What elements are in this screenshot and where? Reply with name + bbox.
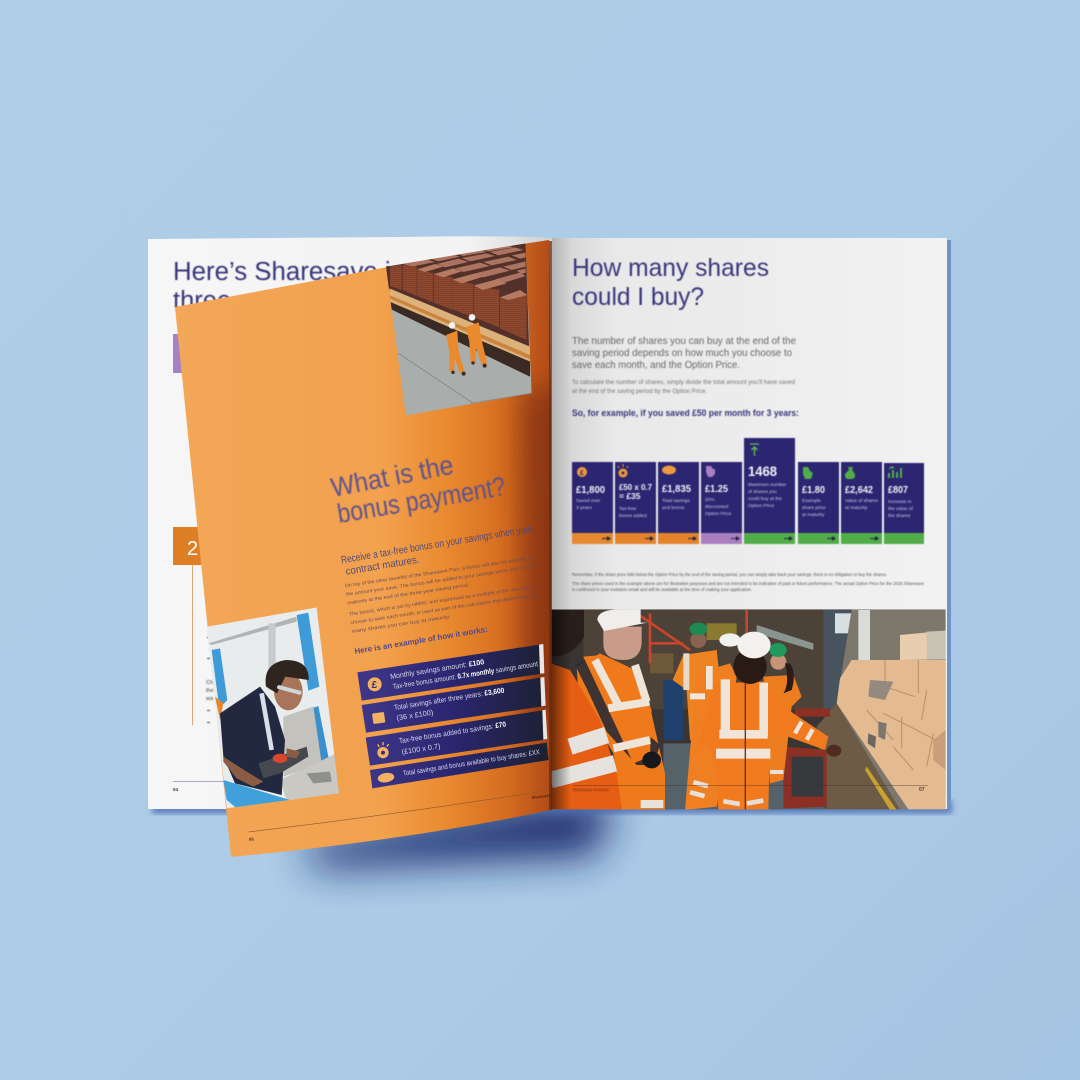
heading — [572, 254, 769, 311]
card: increase in value: the shares — [888, 513, 911, 519]
card: increase in value: Increase in — [888, 499, 912, 505]
card: tax-free bonus added: Tax-free — [619, 506, 637, 512]
brick wall — [837, 631, 946, 809]
card: tax-free bonus added: bonus added — [619, 513, 647, 519]
bar: monthly savings: £ — [372, 680, 378, 691]
bar: monthly savings: Monthly savings amount: £100 — [390, 657, 485, 681]
floor lines — [398, 353, 532, 403]
bullet list fragments: Ch — [206, 680, 213, 686]
bonus intro text: contract matures. — [345, 555, 420, 578]
photo: engineer holding a control device — [207, 607, 340, 808]
card: saved over 3 years: £ — [580, 470, 584, 477]
bar: monthly savings — [357, 644, 544, 701]
worker in navy and orange vest — [575, 609, 665, 810]
card: maximum number of shares: Option Price — [748, 503, 775, 509]
bullet list fragments — [205, 637, 214, 723]
intro paragraph: save each month, and the Option Price. — [572, 360, 740, 371]
heading: Here's Sharesave: three — [173, 287, 231, 315]
card: discounted Option Price: £1.25 — [705, 484, 728, 495]
card: tax-free bonus added: = £35 — [619, 491, 641, 501]
bar: total savings after three years: Total savings after three years: £3,600 — [393, 686, 505, 712]
card: total savings and bonus: and bonus — [662, 505, 685, 511]
footer rule on photo — [573, 784, 928, 787]
card: discounted Option Price: 20% — [705, 497, 715, 503]
foreground worker left — [551, 610, 622, 810]
intro paragraph: The number of shares you can buy at the end of the — [572, 336, 796, 347]
spine fold shading — [520, 390, 570, 730]
bonus body text: On top of the other benefits of the Sharesave Plan, a bonus will also be payable on — [344, 555, 535, 589]
bonus body text: many shares you can buy at maturity. — [351, 614, 451, 635]
orange step box 2 — [173, 527, 213, 565]
bonus body text: matures at the end of the three year saving period. — [347, 582, 470, 606]
heading: What is the bonus payment: What is the — [328, 450, 456, 503]
card: tax-free bonus added — [615, 462, 656, 544]
card: saved over 3 years: Saved over — [576, 498, 601, 504]
chart: step cards — [572, 438, 924, 544]
page number 07: 07 — [919, 787, 925, 793]
footer label on orange page: Sharesave — [532, 793, 551, 800]
card: value of shares at maturity: at maturity — [845, 505, 868, 511]
orange step box 2: 2 — [187, 538, 198, 560]
bar: tax-free bonus added: Tax-free bonus added to savings: £70 — [398, 719, 507, 745]
footer rule on orange page — [248, 790, 550, 832]
bar: tax-free bonus added: (£100 x 0.7) — [401, 741, 441, 756]
man — [220, 660, 309, 795]
card: maximum number of shares: of shares you — [748, 489, 777, 495]
card: total savings and bonus — [658, 462, 699, 544]
card: total savings and bonus: £1,835 — [662, 484, 691, 495]
bonus body text: the amount your save. The bonus will be added to your savings when your SAYE — [346, 564, 536, 598]
panel: turning orange page (page 06) — [175, 240, 570, 857]
shadow under the brochure — [152, 800, 952, 868]
disclaimer text: Remember, if the share price falls below the Option Price by the end of the saving period, you can simply take back your savings; there is no obligation to buy the shares. — [572, 572, 887, 577]
heading: What is the bonus payment — [328, 450, 508, 529]
card: increase in value: £807 — [888, 485, 908, 496]
bar: total savings after three years: (36 x £100) — [396, 708, 434, 722]
card: tax-free bonus added: £50 x 0.7 — [619, 482, 652, 492]
bullet list fragments: the — [206, 688, 214, 694]
card: value of shares at maturity: Value of shares — [845, 498, 879, 504]
card: increase in value: the value of — [888, 506, 913, 512]
card: example share price at maturity: £1.80 — [802, 485, 825, 496]
back rows of brick tops — [403, 245, 526, 283]
front row stacks — [390, 265, 527, 340]
bonus body text: The bonus, which is set by HMRC and expressed as a multiple of the amount you — [349, 583, 539, 618]
pallet bands — [389, 288, 530, 362]
heading: Here's Sharesave: Here’s Sharesave in — [173, 258, 405, 286]
footer rule — [173, 781, 233, 782]
card: saved over 3 years: £1,800 — [576, 485, 605, 496]
card: discounted Option Price: discounted — [705, 504, 729, 510]
bar: total savings after three years — [362, 677, 546, 733]
card: maximum number of shares — [744, 438, 795, 544]
disclaimer text: The share prices used in the example above are for illustrative purposes and are not intended to be indicative of past or future performance. The actual Option Price for the 2025 Sharesave — [572, 581, 925, 586]
intro paragraph: saving period depends on how much you choose to — [572, 348, 792, 359]
calculation note — [572, 379, 795, 395]
card: total savings and bonus: Total savings — [662, 498, 690, 504]
page number 04: 04 — [173, 787, 179, 792]
bonus body text: choose to save each month, is used as part of the calculation that determines how — [350, 592, 540, 626]
red bench — [783, 708, 830, 808]
card: example share price at maturity: at maturity — [802, 512, 825, 518]
timeline line — [192, 565, 193, 725]
bullet list fragments: wa — [205, 696, 214, 702]
disclaimer text — [572, 572, 925, 592]
photo: brick pallets and two workers — [386, 243, 532, 416]
card: discounted Option Price — [701, 462, 742, 544]
card: value of shares at maturity — [841, 462, 882, 544]
card: maximum number of shares: could buy at the — [748, 496, 782, 502]
heading: could I buy? — [572, 283, 704, 311]
heading: How many shares — [572, 254, 769, 282]
bar: monthly savings: Tax-free bonus amount: 0.7x monthly savings amount — [392, 659, 538, 691]
spine edge — [549, 241, 552, 810]
bonus intro text — [340, 524, 536, 578]
card: maximum number of shares: 1468 — [748, 464, 777, 479]
photo: workers in orange hi-vis by brick wall — [551, 609, 946, 810]
gradient shadow at spine — [551, 609, 571, 809]
bar: total savings and bonus — [370, 743, 549, 788]
footer label on photo: Sharesave brochure — [573, 787, 610, 792]
heading: Here's Sharesave — [173, 258, 405, 315]
intro paragraph — [572, 336, 796, 371]
calculation note: at the end of the saving period by the Option Price. — [572, 388, 707, 395]
card: increase in value — [884, 463, 924, 544]
calculation note: To calculate the number of shares, simply divide the total amount you’ll have saved — [572, 379, 795, 386]
background worker green hat — [673, 623, 720, 740]
card: example share price at maturity: share price — [802, 505, 826, 511]
page number 06: 06 — [249, 836, 255, 842]
card: discounted Option Price: Option Price — [705, 511, 732, 517]
central worker pointing — [716, 632, 842, 810]
bonus intro text: Receive a tax-free bonus on your savings when your — [340, 524, 534, 566]
heading: What is the bonus payment: bonus payment? — [335, 471, 508, 529]
background worker white hat and green hat — [763, 643, 802, 783]
two workers in hi-vis — [446, 314, 487, 376]
card: value of shares at maturity: £2,642 — [845, 485, 873, 496]
bonus body text — [344, 555, 542, 635]
panel: left page (page 04) — [148, 236, 552, 809]
panel: right page (page 07) — [551, 238, 951, 810]
purple step box — [173, 334, 213, 373]
disclaimer text: is confirmed in your invitation email and will be available at the time of making your application. — [572, 587, 752, 592]
card: saved over 3 years: 3 years — [576, 505, 592, 511]
bar: tax-free bonus added — [366, 710, 547, 766]
bar: total savings and bonus: Total savings and bonus available to buy shares: £XX — [403, 749, 541, 778]
card: example share price at maturity — [798, 462, 839, 544]
example subheading: Here is an example of how it works: — [354, 625, 488, 656]
card: example share price at maturity: Example — [802, 498, 821, 504]
card: maximum number of shares: Maximum number — [748, 482, 787, 488]
text block and example bars — [340, 524, 549, 788]
example subheading: So, for example, if you saved £50 per month for 3 years: — [572, 408, 799, 419]
card: saved over 3 years — [572, 462, 613, 544]
